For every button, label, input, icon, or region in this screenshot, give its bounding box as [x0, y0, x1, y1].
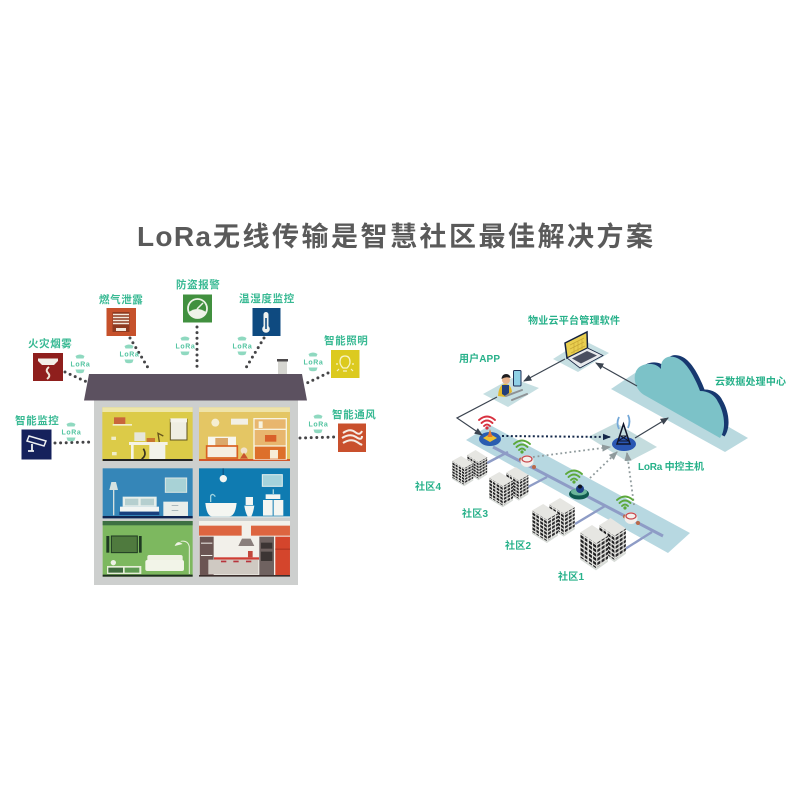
roof: [84, 374, 307, 400]
sensor: gas leak: 燃气泄露: [99, 293, 143, 306]
title: LoRa: [137, 221, 211, 252]
node: meter 1: [514, 440, 536, 469]
community 2 buildings: [532, 498, 575, 543]
sensor: burglar alarm: [176, 278, 220, 322]
room: study: [102, 407, 193, 461]
sensor: smart monitoring: [15, 414, 59, 460]
sensor: smart ventilation: 智能通风: [332, 408, 376, 421]
room: bedroom: [199, 407, 290, 461]
diagram labels: 物业云平台管理软件: [528, 314, 620, 327]
LoRa badges: [62, 336, 328, 441]
LoRa tower: [612, 415, 636, 451]
sensor: smart lighting: [324, 334, 368, 378]
sensor: smart ventilation: [332, 408, 376, 452]
node: gateway device: [479, 416, 501, 446]
community 1 buildings: [580, 518, 626, 570]
diagram labels: 社区4: [415, 480, 441, 493]
room: bathroom: [199, 468, 290, 518]
chimney: [277, 359, 288, 375]
flow arrows: [457, 359, 668, 438]
diagram labels: [415, 314, 786, 583]
diagram labels: 用户APP: [459, 352, 500, 365]
node: controller: [566, 470, 589, 500]
node: meter 2: [617, 496, 640, 525]
diagram labels: 云数据处理中心: [715, 375, 786, 388]
community road band: [466, 425, 690, 553]
diagram labels: 社区2: [505, 539, 531, 552]
sensor links: [55, 327, 335, 443]
community 3 buildings: [489, 467, 528, 507]
sensor: gas leak: [99, 293, 143, 336]
black dotted link: [502, 436, 610, 437]
diagram labels: 社区1: [558, 570, 584, 583]
sensor: temperature and humidity: 温湿度监控: [239, 292, 295, 305]
user with phone: [498, 370, 527, 400]
sensor: fire smoke: 火灾烟雾: [28, 337, 72, 350]
pipeline: [487, 447, 663, 549]
community 4 buildings: [452, 450, 487, 486]
sensor: smart monitoring: 智能监控: [15, 414, 59, 427]
gray dotted links: [533, 447, 634, 505]
house illustration: [84, 359, 307, 585]
sensor: fire smoke: [28, 337, 72, 381]
isometric plates: [483, 340, 748, 462]
cloud: [635, 355, 729, 438]
room: media room: [103, 521, 193, 577]
house body: [94, 398, 298, 585]
sensor: burglar alarm: 防盗报警: [176, 278, 220, 291]
title: 无线传输是智慧社区最佳解决方案: [213, 221, 653, 252]
room: living room: [103, 468, 193, 518]
sensor: smart lighting: 智能照明: [324, 334, 368, 347]
diagram labels: 社区3: [462, 507, 488, 520]
diagram labels: LoRa 中控主机: [638, 460, 704, 473]
room: kitchen: [199, 521, 290, 577]
laptop: [565, 332, 603, 368]
sensor: temperature and humidity: [239, 292, 295, 336]
